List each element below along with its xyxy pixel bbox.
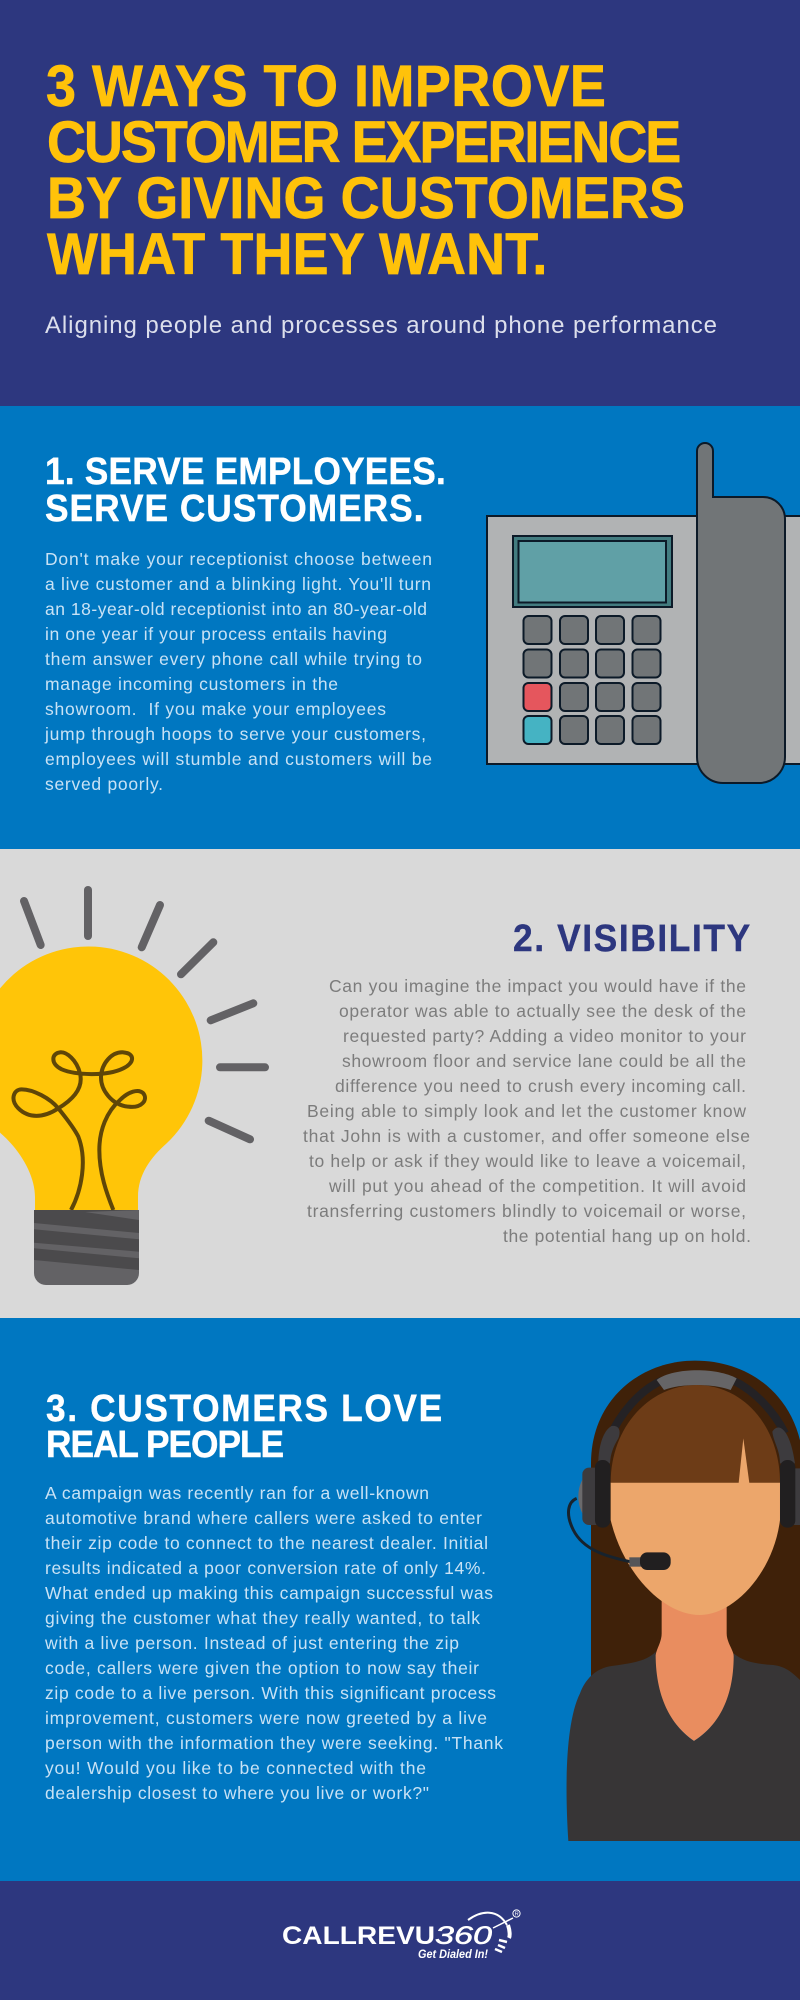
body text: real people: What ended up making this campaign successful was	[45, 1583, 493, 1603]
body text: visibility: requested party? Adding a video monitor to your	[343, 1026, 746, 1046]
body text: visibility: Can you imagine the impact you would have if the	[329, 976, 746, 996]
bulb base	[34, 1210, 139, 1285]
body text: real people: results indicated a poor conversion rate of only 14%.	[45, 1558, 486, 1578]
body text: real people: person with the information they were seeking. "Thank	[45, 1733, 503, 1753]
body text: visibility	[303, 976, 751, 1246]
body text: serve employees: an 18-year-old receptionist into an 80-year-old	[45, 599, 427, 619]
panel: serve employees	[0, 406, 800, 849]
body text: serve employees	[44, 549, 432, 794]
heading: visibility: 2. VISIBILITY	[513, 917, 750, 959]
logo: CallRevu360: 360	[435, 1922, 492, 1950]
body text: real people: giving the customer what they really wanted, to talk	[45, 1608, 480, 1628]
phone screen	[513, 536, 672, 607]
title: BY GIVING CUSTOMERS	[47, 165, 685, 230]
body text: real people: A campaign was recently ran for a well-known	[45, 1483, 429, 1503]
body text: serve employees: in one year if your process entails having	[45, 624, 387, 644]
subtitle: Aligning people and processes around phone performance	[45, 312, 717, 339]
body text: visibility: showroom floor and service lane could be all the	[342, 1051, 746, 1071]
panel: footer	[0, 1881, 800, 2000]
fringe parting	[739, 1438, 749, 1483]
bulb filament	[14, 1052, 145, 1210]
icon: light bulb	[0, 890, 265, 1285]
body text: real people: zip code to a live person. With this significant process	[45, 1683, 496, 1703]
bulb light rays	[24, 890, 265, 1139]
body text: visibility: the potential hang up on hold.	[503, 1226, 751, 1246]
heading: real people: REAL PEOPLE	[46, 1423, 284, 1465]
title: 3 WAYS TO IMPROVE	[46, 53, 606, 118]
icon: desk phone	[487, 443, 800, 783]
phone handset	[697, 443, 785, 783]
body text: real people: improvement, customers were now greeted by a live	[45, 1708, 487, 1728]
heading: serve employees	[45, 450, 446, 529]
heading: serve employees: 1. SERVE EMPLOYEES.	[45, 450, 446, 492]
hair back	[591, 1361, 800, 1683]
body text: real people: their zip code to connect to the nearest dealer. Initial	[45, 1533, 488, 1553]
body text: visibility: Being able to simply look and let the customer know	[307, 1101, 746, 1121]
body text: serve employees: served poorly.	[45, 774, 163, 794]
body text: serve employees: manage incoming customers in the	[45, 674, 338, 694]
icon: woman with headset	[567, 1361, 800, 1841]
heading: serve employees: SERVE CUSTOMERS.	[45, 487, 424, 529]
body text: visibility: operator was able to actually see the desk of the	[339, 1001, 746, 1021]
bulb glass	[0, 946, 202, 1210]
fringe	[611, 1385, 780, 1483]
heading: real people: 3. CUSTOMERS LOVE	[46, 1387, 442, 1429]
title	[46, 53, 685, 286]
logo: CallRevu360: CALLREVU	[282, 1922, 435, 1950]
body text: serve employees: jump through hoops to serve your customers,	[44, 724, 426, 744]
heading: real people	[46, 1387, 442, 1465]
phone keypad	[524, 616, 660, 744]
body text: real people: you! Would you like to be connected with the	[45, 1758, 426, 1778]
panel: real people	[0, 1318, 800, 1881]
panel: visibility	[0, 849, 800, 1318]
shirt	[567, 1652, 800, 1841]
face	[611, 1483, 780, 1615]
neck	[655, 1600, 734, 1741]
body text: serve employees: them answer every phone call while trying to	[45, 649, 422, 669]
panel: header	[0, 0, 800, 406]
body text: visibility: to help or ask if they would like to leave a voicemail,	[309, 1151, 746, 1171]
body text: serve employees: showroom. If you make your employees	[45, 699, 386, 719]
logo: CallRevu360: R	[515, 1912, 519, 1918]
body text: real people: with a live person. Instead of just entering the zip	[44, 1633, 459, 1653]
body text: real people	[44, 1483, 503, 1803]
headset	[569, 1370, 800, 1570]
title: CUSTOMER EXPERIENCE	[47, 109, 681, 174]
body text: visibility: transferring customers blindly to voicemail or worse,	[307, 1201, 746, 1221]
body text: visibility: that John is with a customer, and offer someone else	[303, 1126, 750, 1146]
logo: CallRevu360	[282, 1910, 520, 1961]
body text: visibility: will put you ahead of the competition. It will avoid	[328, 1176, 746, 1196]
body text: real people: dealership closest to where you live or work?"	[45, 1783, 429, 1803]
body text: serve employees: employees will stumble and customers will be	[45, 749, 432, 769]
title: WHAT THEY WANT.	[47, 221, 547, 286]
body text: visibility: difference you need to crush every incoming call.	[335, 1076, 746, 1096]
body text: real people: code, callers were given the option to now say their	[45, 1658, 479, 1678]
logo: CallRevu360: Get Dialed In!	[418, 1947, 488, 1961]
body text: serve employees: Don't make your receptionist choose between	[45, 549, 432, 569]
body text: real people: automotive brand where callers were asked to enter	[45, 1508, 482, 1528]
body text: serve employees: a live customer and a blinking light. You'll turn	[45, 574, 431, 594]
